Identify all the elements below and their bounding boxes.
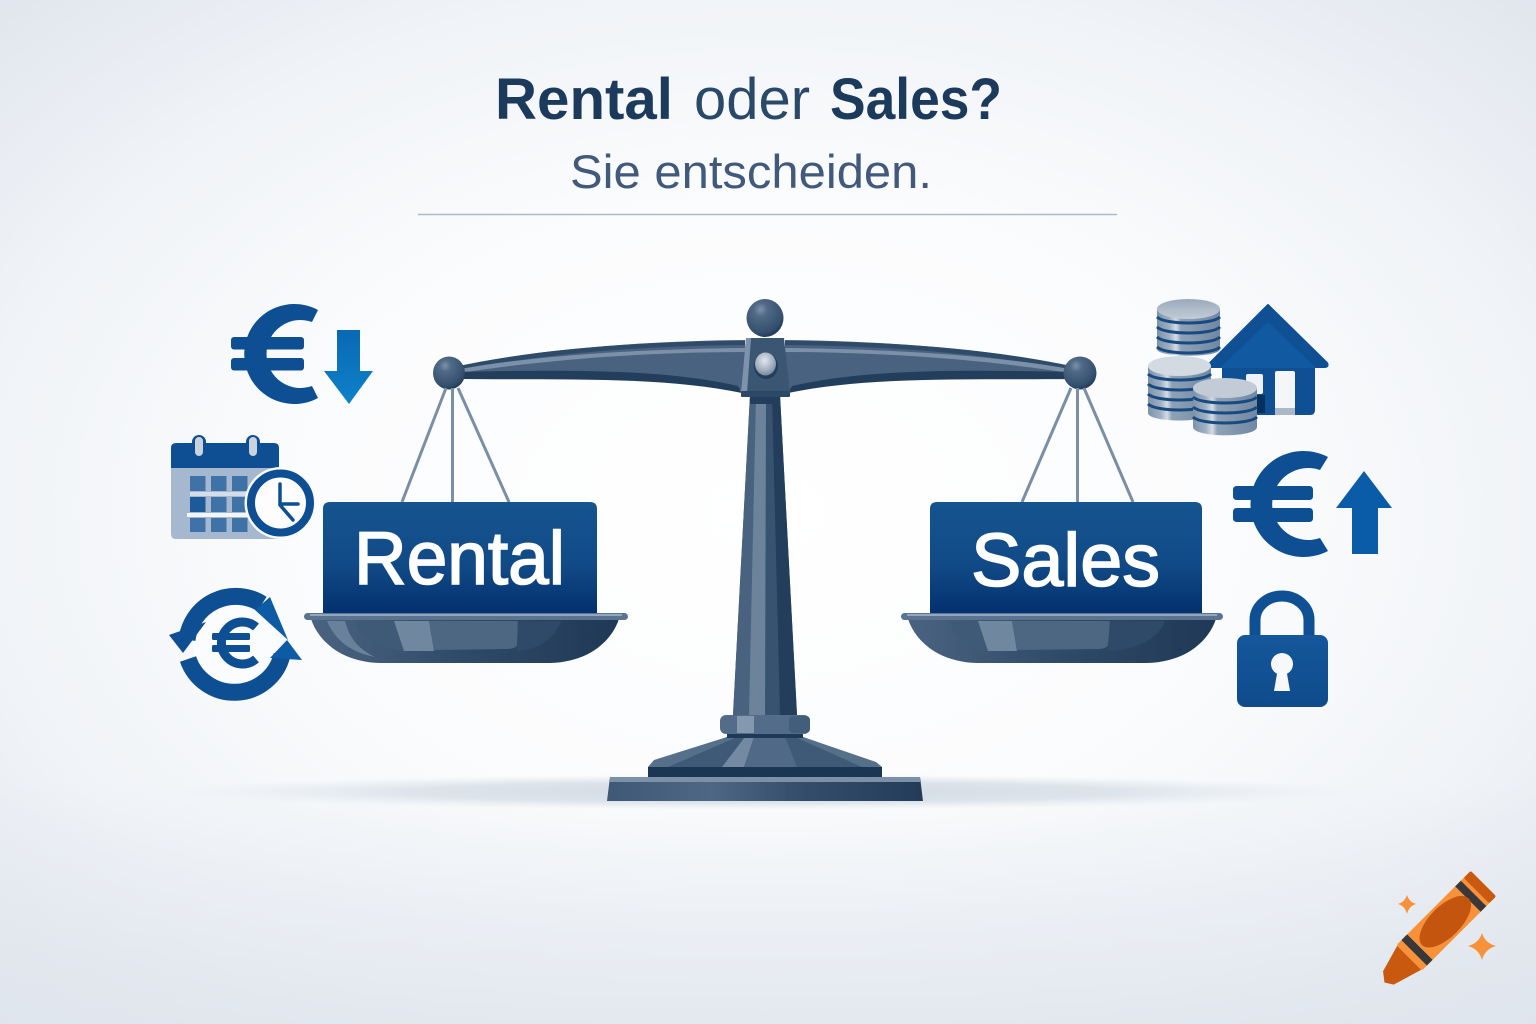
left pan strings — [402, 388, 509, 502]
scale beam — [433, 299, 1096, 397]
icon: crayon logo — [1372, 871, 1496, 995]
icon: padlock — [1237, 596, 1328, 707]
scale base — [607, 715, 923, 801]
coin stack 3 — [1193, 378, 1257, 435]
icon: euro cycle — [169, 596, 302, 692]
icon: euro with down arrow — [231, 304, 373, 404]
rental sign: Rental — [354, 516, 565, 600]
title: Rental — [495, 67, 673, 132]
sales sign — [930, 502, 1202, 614]
coin stack 2 — [1148, 356, 1211, 420]
sales pan — [901, 613, 1223, 663]
sales sign: Sales — [971, 518, 1160, 602]
title: Sales? — [830, 67, 1002, 132]
title — [495, 67, 1002, 132]
icon: coins and house — [1148, 299, 1328, 435]
rental sign — [323, 502, 597, 614]
title: oder — [694, 67, 810, 132]
icon: calendar with clock — [171, 435, 316, 539]
ground shadow — [165, 774, 1365, 810]
coin stack 1 — [1157, 299, 1220, 356]
balance scale — [402, 299, 1133, 801]
scale stand column — [733, 395, 797, 715]
panel: Rental sign and pan — [304, 502, 628, 663]
icon: euro with up arrow — [1233, 451, 1392, 557]
right pan strings — [1022, 388, 1133, 502]
panel: Sales sign and pan — [901, 502, 1223, 663]
house — [1209, 305, 1328, 415]
rental pan — [304, 613, 628, 663]
subtitle: Sie entscheiden. — [570, 145, 932, 198]
